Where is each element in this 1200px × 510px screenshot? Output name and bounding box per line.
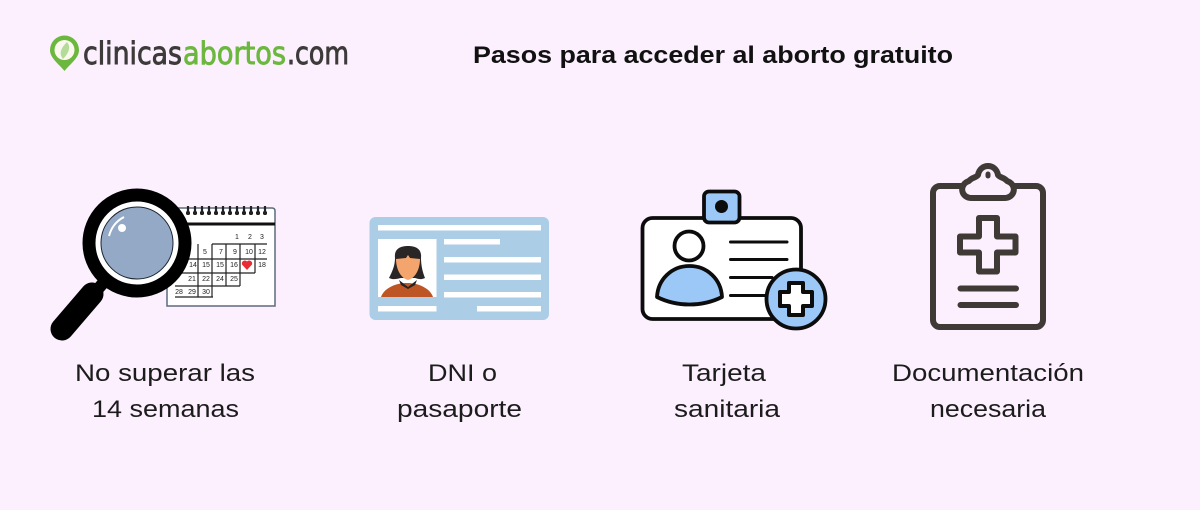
calendar grid (175, 244, 267, 297)
icon: heart (242, 261, 252, 270)
label: step 4 (892, 360, 1084, 423)
label: step 4: necesaria (930, 396, 1046, 423)
label: step 3: sanitaria (674, 396, 780, 423)
calendar numbers: 14 (189, 262, 197, 269)
label: step 1 (75, 360, 255, 423)
panel: step 1 calendar and magnifier (62, 195, 275, 423)
calendar numbers: 12 (258, 249, 266, 256)
calendar rings (186, 206, 267, 215)
calendar numbers: 15 (202, 262, 210, 269)
calendar numbers: 1 (235, 234, 239, 241)
logo wordmark (83, 36, 349, 72)
calendar numbers: 30 (202, 289, 210, 296)
label: step 3: Tarjeta (682, 360, 766, 387)
label: step 1: No superar las (75, 360, 255, 387)
label: step 4: Documentación (892, 360, 1084, 387)
calendar numbers: 7 (219, 249, 223, 256)
label: step 3 (674, 360, 780, 423)
calendar numbers: 18 (258, 262, 266, 269)
calendar numbers: 16 (230, 262, 238, 269)
portrait (381, 246, 433, 297)
calendar numbers: 24 (216, 276, 224, 283)
label: step 2 (397, 360, 522, 423)
icon: magnifying glass (62, 195, 185, 329)
panel: step 3 health card (642, 192, 826, 423)
calendar numbers: 15 (216, 262, 224, 269)
calendar numbers: 10 (245, 249, 253, 256)
calendar numbers: 25 (230, 276, 238, 283)
calendar numbers: 29 (188, 289, 196, 296)
label: step 2: DNI o (428, 360, 497, 387)
calendar numbers: 22 (202, 276, 210, 283)
logo wordmark: abortos (183, 36, 286, 72)
title: Pasos para acceder al aborto gratuito (473, 42, 953, 69)
panel: step 2 ID card (370, 217, 549, 423)
panel: step 4 clipboard (892, 166, 1084, 423)
icon: calendar (167, 206, 275, 306)
calendar numbers: 9 (233, 249, 237, 256)
calendar numbers: 21 (188, 276, 196, 283)
icon: clipboard (933, 166, 1043, 327)
calendar numbers: 3 (260, 234, 264, 241)
calendar numbers (175, 234, 266, 296)
logo wordmark: clinicas (83, 36, 182, 72)
logo (50, 36, 349, 72)
label: step 1: 14 semanas (92, 396, 239, 423)
logo wordmark: .com (287, 36, 349, 72)
calendar numbers: 28 (175, 289, 183, 296)
icon: location pin (50, 36, 79, 71)
icon: ID card (370, 217, 549, 320)
calendar numbers: 2 (248, 234, 252, 241)
label: step 2: pasaporte (397, 396, 522, 423)
icon: health card (642, 192, 826, 328)
calendar numbers: 5 (203, 249, 207, 256)
